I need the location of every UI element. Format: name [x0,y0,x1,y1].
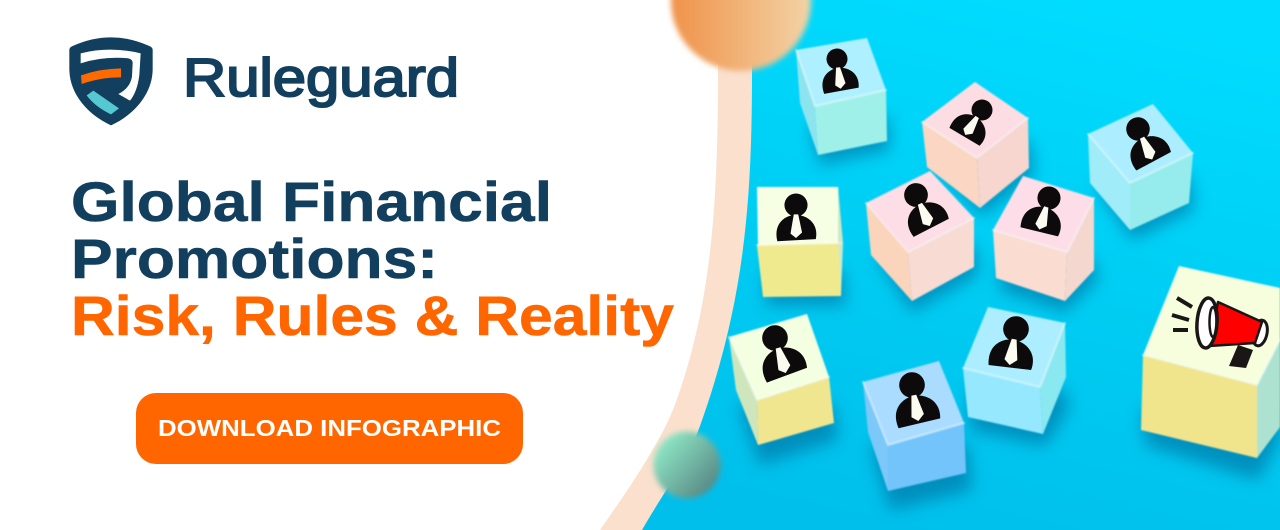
white panel with peach band [0,0,752,530]
cube 9: cyan [963,307,1066,434]
title line 3: Risk, Rules & Reality [71,284,674,347]
wordmark: Ruleguard [183,48,459,108]
title line 2: Promotions: [71,227,438,290]
cube 3: cyan [1088,104,1193,230]
cube 8: blue [863,361,966,491]
title [71,170,674,347]
cube 10: large yellow with megaphone [1141,266,1280,458]
decorative orange sphere [671,0,811,71]
button [136,393,523,464]
cube shadows [738,115,1280,510]
cube 1: cyan [796,38,887,155]
photo background [600,0,1280,530]
cube 4: yellow [757,187,843,297]
icon: megaphone [1172,297,1270,368]
logo [69,37,459,125]
icon: shield [69,37,153,125]
cube 2: pink [922,82,1029,208]
button label: DOWNLOAD INFOGRAPHIC [158,415,501,441]
cube 6: pink [993,176,1094,301]
decorative green sphere [654,432,720,498]
cube 5: pink [866,171,974,301]
cube 7: yellow [729,314,834,445]
title line 1: Global Financial [71,170,552,233]
